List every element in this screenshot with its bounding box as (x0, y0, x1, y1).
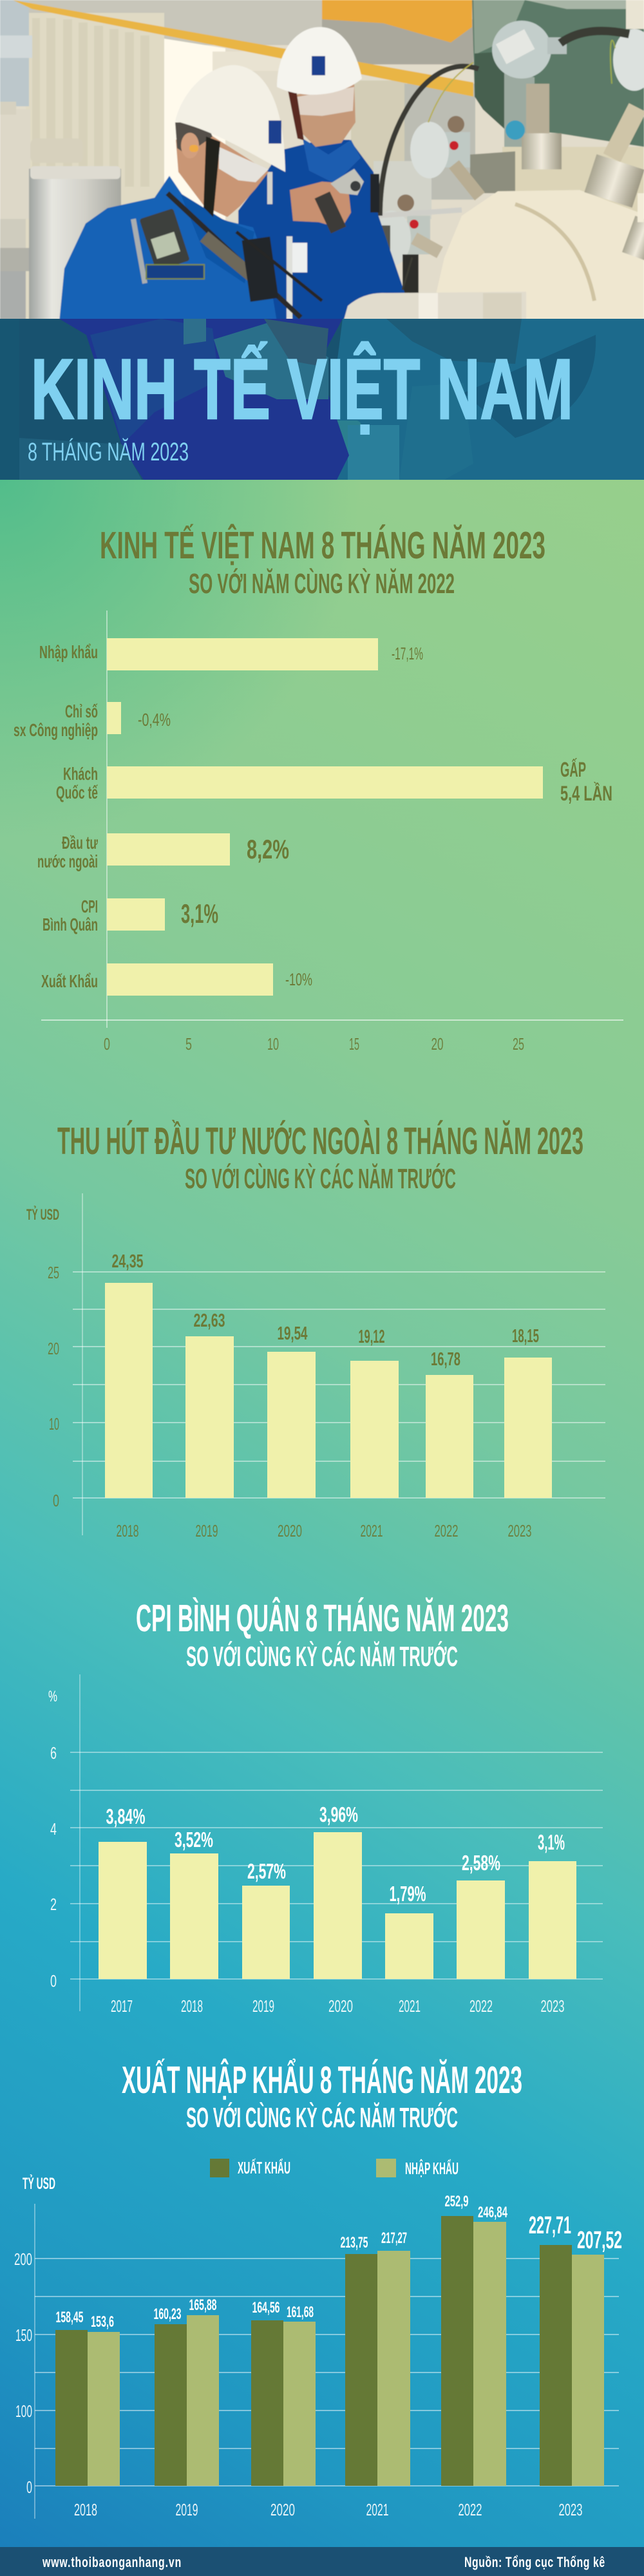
value labels: 22,63 (193, 1311, 225, 1331)
value labels: 158,45 (55, 2309, 84, 2326)
value labels: 160,23 (153, 2306, 182, 2323)
value labels: 1,79% (389, 1882, 426, 1906)
year labels: 2020 (270, 2500, 295, 2519)
value labels: 3,84% (106, 1804, 146, 1828)
category labels: CPI (81, 896, 98, 916)
y axis labels: 150 (15, 2325, 32, 2345)
axis ticks: 20 (431, 1034, 443, 1054)
axis ticks: 0 (104, 1034, 110, 1054)
value labels: 161,68 (287, 2304, 314, 2321)
legend: XUẤT KHẨU (238, 2158, 290, 2177)
value labels: 3,1% (181, 898, 218, 929)
y axis labels (48, 1263, 59, 1510)
value labels: 8,2% (247, 834, 289, 864)
year labels: 2019 (252, 1996, 274, 2016)
value labels: 164,56 (252, 2299, 279, 2316)
overhead beams (13, 0, 473, 97)
y axis labels: 0 (26, 2477, 32, 2497)
year labels: 2021 (366, 2500, 389, 2519)
value labels (112, 1251, 539, 1370)
category labels: Bình Quân (43, 914, 98, 934)
y axis labels: 25 (48, 1263, 59, 1282)
y axis labels (14, 2249, 32, 2497)
legend: NHẬP KHẨU (405, 2159, 459, 2178)
category labels: nước ngoài (37, 851, 98, 871)
website: www.thoibaonganhang.vn (42, 2555, 181, 2571)
value labels: 217,27 (381, 2230, 407, 2247)
value labels: GẤP (560, 758, 586, 781)
value labels: 19,54 (277, 1323, 308, 1344)
category labels: sx Công nghiệp (14, 720, 98, 740)
year labels (116, 1521, 532, 1540)
footer band (0, 2547, 644, 2576)
year labels (111, 1996, 564, 2016)
tinted machinery (322, 319, 644, 480)
hero photo: workers inspecting machinery (0, 0, 644, 322)
year labels (74, 2500, 582, 2519)
value labels: -10% (285, 970, 312, 989)
y axis labels: 0 (53, 1491, 59, 1510)
value labels: -0,4% (138, 710, 171, 730)
clustered column chart (14, 2174, 622, 2519)
value labels (138, 644, 612, 989)
panel: Vietnam economy overview (14, 524, 623, 1054)
y axis labels: 100 (15, 2401, 32, 2421)
panel: average CPI (48, 1596, 603, 2016)
y axis labels: 20 (48, 1339, 59, 1358)
year labels: 2022 (469, 1996, 493, 2016)
year labels: 2020 (328, 1996, 353, 2016)
column chart (26, 1193, 605, 1540)
machinery: green housing (472, 0, 644, 147)
value labels: 3,96% (319, 1803, 358, 1826)
value labels: 16,78 (431, 1349, 460, 1370)
category labels: Xuất Khẩu (41, 971, 98, 991)
value labels: 2,57% (247, 1859, 286, 1883)
y axis labels: 0 (50, 1971, 57, 1991)
category labels: Đầu tư (62, 833, 98, 853)
axis ticks: 10 (267, 1034, 279, 1054)
year labels: 2022 (459, 2500, 482, 2519)
tinted worker (59, 319, 349, 480)
y axis labels: 6 (50, 1743, 57, 1763)
foreground pipe (343, 292, 526, 322)
year labels: 2023 (541, 1996, 564, 2016)
value labels: 3,1% (538, 1830, 565, 1854)
year labels: 2017 (111, 1996, 133, 2016)
axis ticks (104, 1034, 524, 1054)
column chart (48, 1674, 603, 2016)
y axis labels: 4 (50, 1819, 57, 1839)
panel: foreign investment (26, 1120, 605, 1540)
year labels: 2023 (507, 1521, 532, 1540)
axis ticks: 5 (185, 1034, 192, 1054)
unit label: % (48, 1688, 57, 1705)
year labels: 2018 (181, 1996, 203, 2016)
year labels: 2019 (196, 1521, 218, 1540)
horizontal bar chart (14, 611, 623, 1054)
front worker (59, 176, 277, 322)
value labels: 18,15 (512, 1326, 539, 1347)
panel: import and export (14, 2058, 622, 2519)
legend (210, 2158, 459, 2178)
category labels: Khách (63, 764, 98, 784)
machinery: cream body (502, 147, 644, 322)
machinery: gauges (492, 21, 551, 79)
value labels: 213,75 (340, 2234, 368, 2251)
axis ticks: 15 (349, 1034, 359, 1054)
value labels: 165,88 (189, 2297, 216, 2314)
title band with tinted photo (0, 319, 644, 480)
value labels: 24,35 (112, 1251, 143, 1272)
year labels: 2020 (278, 1521, 302, 1540)
value labels (106, 1803, 565, 1906)
value labels: 153,6 (91, 2313, 114, 2331)
value labels: 19,12 (358, 1327, 385, 1347)
category labels: Quốc tế (56, 782, 98, 802)
sub title: 8 THÁNG NĂM 2023 (28, 437, 189, 466)
source: Nguồn: Tổng cục Thống kê (464, 2555, 605, 2571)
value labels: -17,1% (392, 644, 423, 663)
value labels: 227,71 (529, 2212, 571, 2239)
year labels: 2018 (74, 2500, 97, 2519)
year labels: 2022 (434, 1521, 459, 1540)
year labels: 2019 (175, 2500, 198, 2519)
year labels: 2021 (399, 1996, 421, 2016)
category labels (14, 642, 98, 991)
year labels: 2018 (116, 1521, 139, 1540)
year labels: 2023 (559, 2500, 582, 2519)
value labels: 3,52% (175, 1828, 213, 1852)
subheading: SO VỚI NĂM CÙNG KỲ NĂM 2022 (189, 567, 455, 600)
back worker (238, 140, 407, 322)
unit label: TỶ USD (23, 2174, 55, 2193)
year labels: 2021 (361, 1521, 383, 1540)
axis ticks: 25 (513, 1034, 524, 1054)
y axis labels: 2 (50, 1895, 57, 1914)
value labels: 2,58% (462, 1851, 500, 1875)
category labels: Chỉ số (65, 701, 98, 721)
value labels: 252,9 (444, 2193, 469, 2210)
y axis labels (50, 1743, 57, 1991)
value labels: 246,84 (478, 2204, 507, 2221)
left pipework (0, 109, 30, 219)
value labels (55, 2193, 622, 2331)
y axis labels: 10 (49, 1414, 59, 1434)
unit label: TỶ USD (26, 1205, 59, 1224)
y axis labels: 200 (14, 2249, 32, 2269)
category labels: Nhập khẩu (39, 642, 98, 662)
value labels: 5,4 LẦN (560, 782, 612, 805)
